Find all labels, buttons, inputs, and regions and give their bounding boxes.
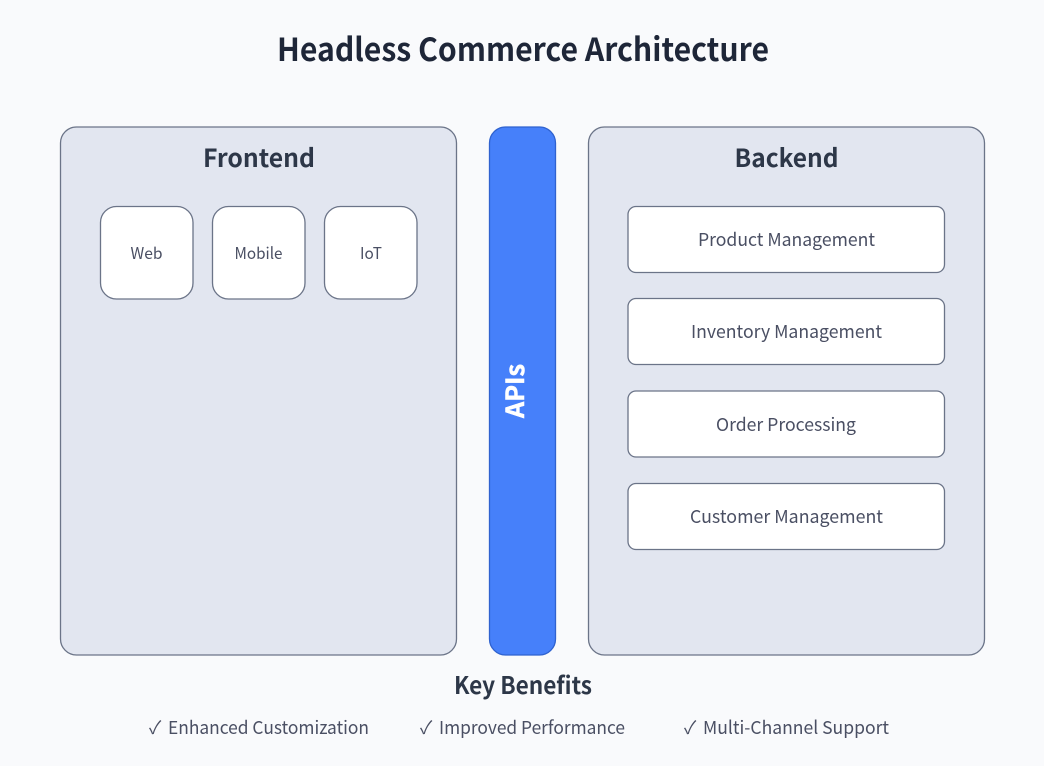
panel: apis: [490, 127, 556, 655]
heading: backend: Backend: [734, 139, 838, 175]
card: product management: Product Management: [698, 226, 875, 252]
benefit: enhanced customization: ✓: [149, 714, 162, 740]
card: web: Web: [130, 240, 163, 264]
card: web: [100, 206, 193, 299]
card: inventory management: [628, 298, 944, 364]
card: order processing: [628, 391, 944, 457]
card: customer management: Customer Management: [690, 503, 883, 529]
heading: key benefits: Key Benefits: [454, 666, 592, 701]
card: customer management: [628, 484, 944, 550]
title: Headless Commerce Architecture: [277, 25, 769, 71]
card: product management: [628, 206, 944, 272]
card: mobile: Mobile: [234, 240, 283, 264]
card: order processing: Order Processing: [716, 411, 856, 437]
card: iot: IoT: [360, 240, 382, 264]
panel: frontend: [60, 127, 456, 655]
benefit: multi-channel support: ✓: [684, 714, 697, 740]
benefit: enhanced customization: Enhanced Customization: [168, 714, 369, 740]
label: apis: APIs: [496, 364, 532, 419]
benefit: multi-channel support: Multi-Channel Support: [703, 714, 889, 740]
benefit: improved performance: Improved Performance: [439, 714, 625, 740]
heading: frontend: Frontend: [203, 139, 315, 175]
card: inventory management: Inventory Management: [691, 318, 882, 344]
card: iot: [324, 206, 417, 299]
benefit: improved performance: ✓: [420, 714, 433, 740]
panel: backend: [588, 127, 984, 655]
card: mobile: [212, 206, 305, 299]
